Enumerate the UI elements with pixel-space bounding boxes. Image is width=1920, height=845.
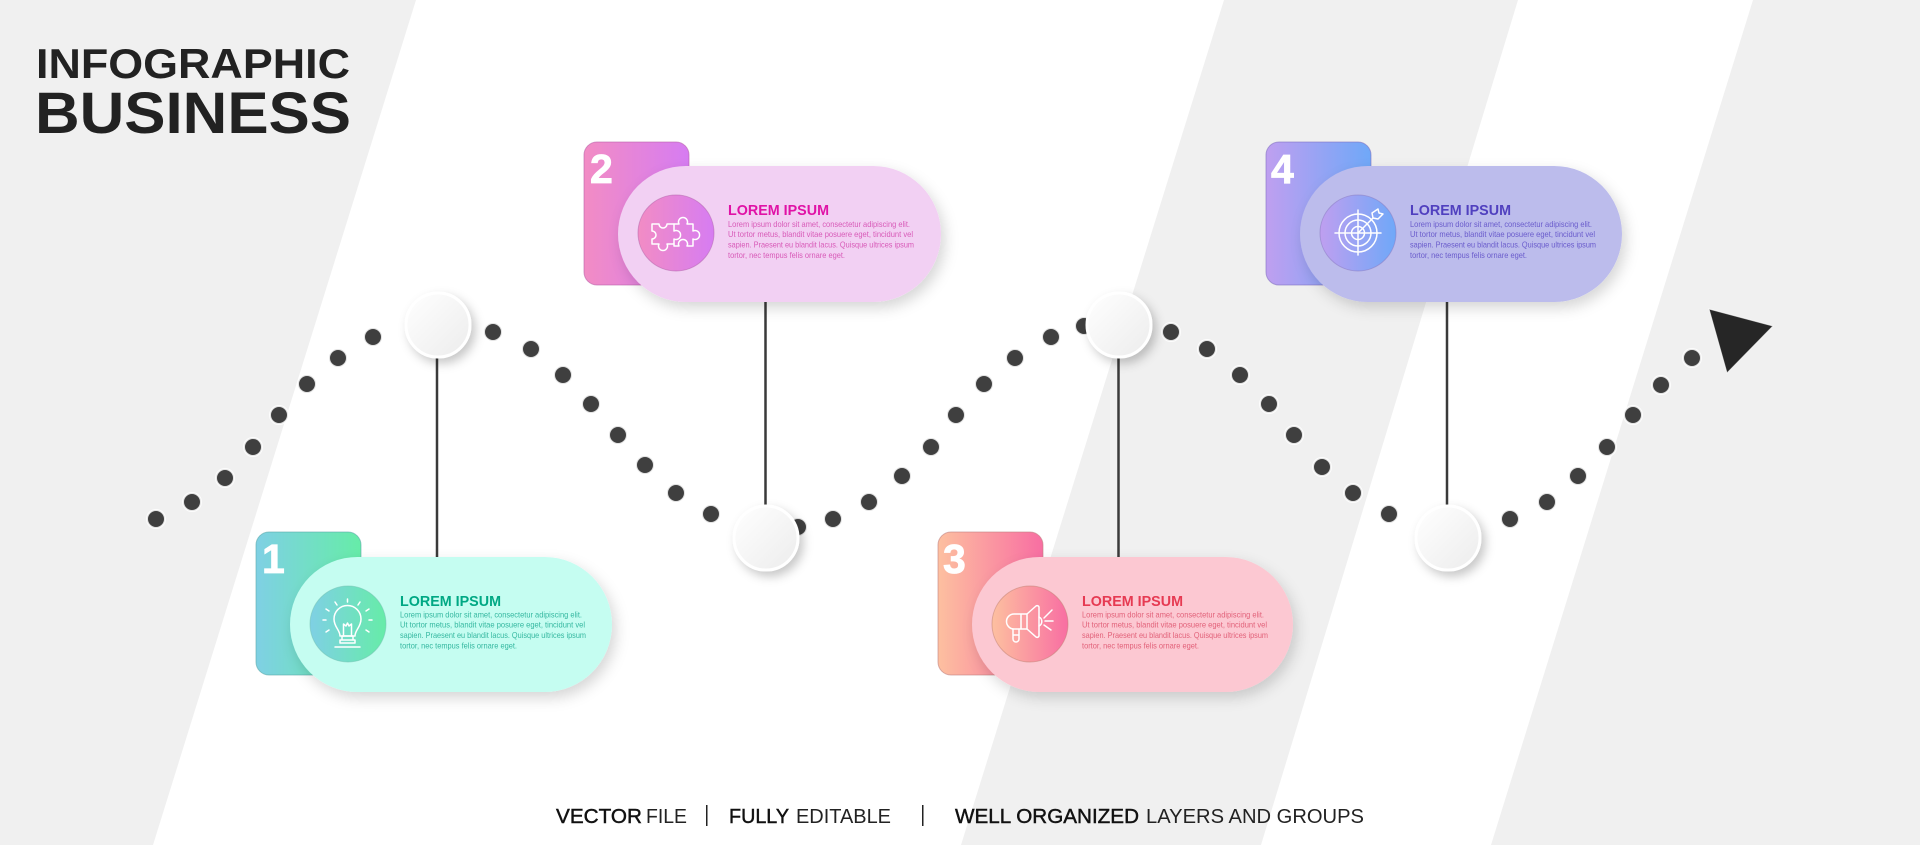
icon disc (638, 195, 714, 271)
body text (400, 610, 586, 650)
footer tagline: WELL ORGANIZED (955, 805, 1139, 828)
icon: puzzle pieces (652, 217, 700, 251)
icon: light bulb (323, 599, 372, 647)
body text: Ut tortor metus, blandit vitae posuere eget, tincidunt vel (400, 620, 585, 630)
footer tagline: LAYERS AND GROUPS (1146, 805, 1364, 828)
icon disc (1320, 195, 1396, 271)
body text: Lorem ipsum dolor sit amet, consectetur adipiscing elit. (728, 219, 910, 229)
title: LOREM IPSUM (728, 202, 829, 219)
title: LOREM IPSUM (1082, 593, 1183, 610)
body text: sapien. Praesent eu blandit lacus. Quisque ultrices ipsum (1082, 630, 1268, 640)
panel: step 1 (256, 532, 612, 692)
footer tagline: EDITABLE (796, 805, 891, 828)
pill (618, 166, 941, 302)
icon: target with arrow (1335, 209, 1383, 255)
footer tagline: FULLY (729, 805, 789, 828)
panel: step 3 (938, 532, 1293, 692)
body text: tortor, nec tempus felis ornare eget. (1410, 250, 1527, 260)
number tab 2 (584, 142, 689, 285)
body text: Ut tortor metus, blandit vitae posuere eget, tincidunt vel (1410, 229, 1595, 239)
node 2 (734, 506, 798, 570)
title: LOREM IPSUM (400, 593, 501, 610)
number 2: 2 (590, 146, 613, 192)
pill (290, 557, 612, 692)
panel: step 4 (1266, 142, 1622, 302)
node 4 (1416, 506, 1480, 570)
number tab 3 (938, 532, 1043, 675)
dotted path (147, 317, 1701, 536)
icon: megaphone (1007, 606, 1053, 642)
number 4: 4 (1271, 146, 1294, 192)
footer tagline: FILE (646, 805, 687, 828)
number tab 1 (256, 532, 361, 675)
icon disc (310, 586, 386, 662)
body text: Lorem ipsum dolor sit amet, consectetur adipiscing elit. (1082, 610, 1264, 620)
body text: sapien. Praesent eu blandit lacus. Quisque ultrices ipsum (400, 630, 586, 640)
body text: sapien. Praesent eu blandit lacus. Quisque ultrices ipsum (728, 240, 914, 250)
panel: step 2 (584, 142, 941, 302)
connector lines (437, 298, 1447, 560)
node 1 (406, 293, 470, 357)
footer tagline (556, 805, 1364, 828)
body text: sapien. Praesent eu blandit lacus. Quisque ultrices ipsum (1410, 240, 1596, 250)
body text (728, 219, 914, 260)
number tab 4 (1266, 142, 1371, 285)
body text: Lorem ipsum dolor sit amet, consectetur adipiscing elit. (1410, 219, 1592, 229)
arrow head (1709, 309, 1773, 373)
number 3: 3 (943, 536, 966, 582)
body text: Ut tortor metus, blandit vitae posuere eget, tincidunt vel (1082, 620, 1267, 630)
title: LOREM IPSUM (1410, 202, 1511, 219)
number 1: 1 (262, 536, 285, 582)
body text: Lorem ipsum dolor sit amet, consectetur adipiscing elit. (400, 610, 582, 620)
footer tagline: VECTOR (556, 805, 642, 828)
title (35, 40, 351, 146)
body text: tortor, nec tempus felis ornare eget. (728, 250, 845, 260)
body text (1410, 219, 1596, 260)
body text: tortor, nec tempus felis ornare eget. (1082, 640, 1199, 650)
pill (1300, 166, 1622, 302)
icon disc (992, 586, 1068, 662)
pill (972, 557, 1293, 692)
body text: tortor, nec tempus felis ornare eget. (400, 640, 517, 650)
title: BUSINESS (35, 81, 351, 146)
body text: Ut tortor metus, blandit vitae posuere eget, tincidunt vel (728, 229, 913, 239)
title: INFOGRAPHIC (36, 40, 350, 87)
body text (1082, 610, 1268, 650)
node 3 (1087, 293, 1151, 357)
